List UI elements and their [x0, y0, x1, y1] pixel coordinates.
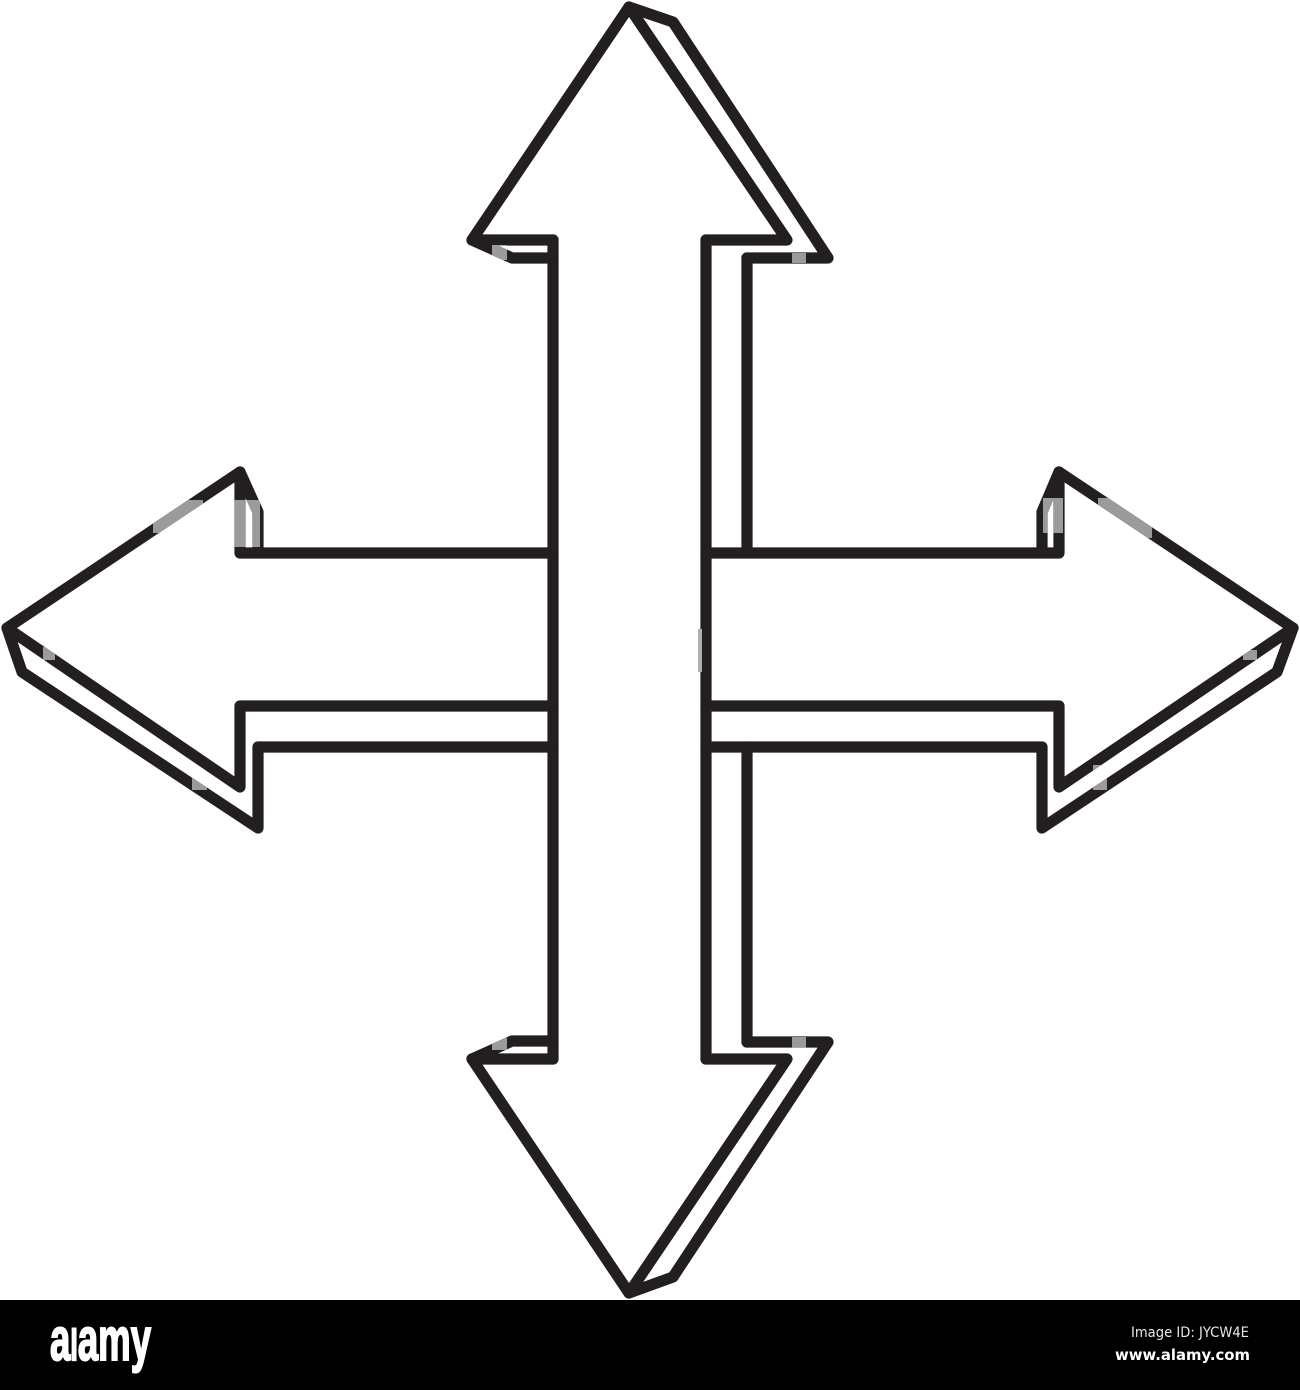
- arrow: left: [7, 472, 553, 828]
- arrow: up: [472, 7, 828, 258]
- arrow: right: [706, 472, 1293, 828]
- arrow: down: [472, 1041, 828, 1293]
- footer bar: [0, 1300, 1300, 1390]
- website: www.alamy.com: [1115, 1346, 1250, 1364]
- vertical shaft: [553, 240, 747, 1059]
- image id: Image ID: JYCW4E: [1131, 1325, 1249, 1341]
- logo: alamy: alamy: [50, 1306, 151, 1373]
- watermark sliver on the shaft: [698, 629, 702, 672]
- watermark fragments on the arrow lines: [43, 245, 1257, 1050]
